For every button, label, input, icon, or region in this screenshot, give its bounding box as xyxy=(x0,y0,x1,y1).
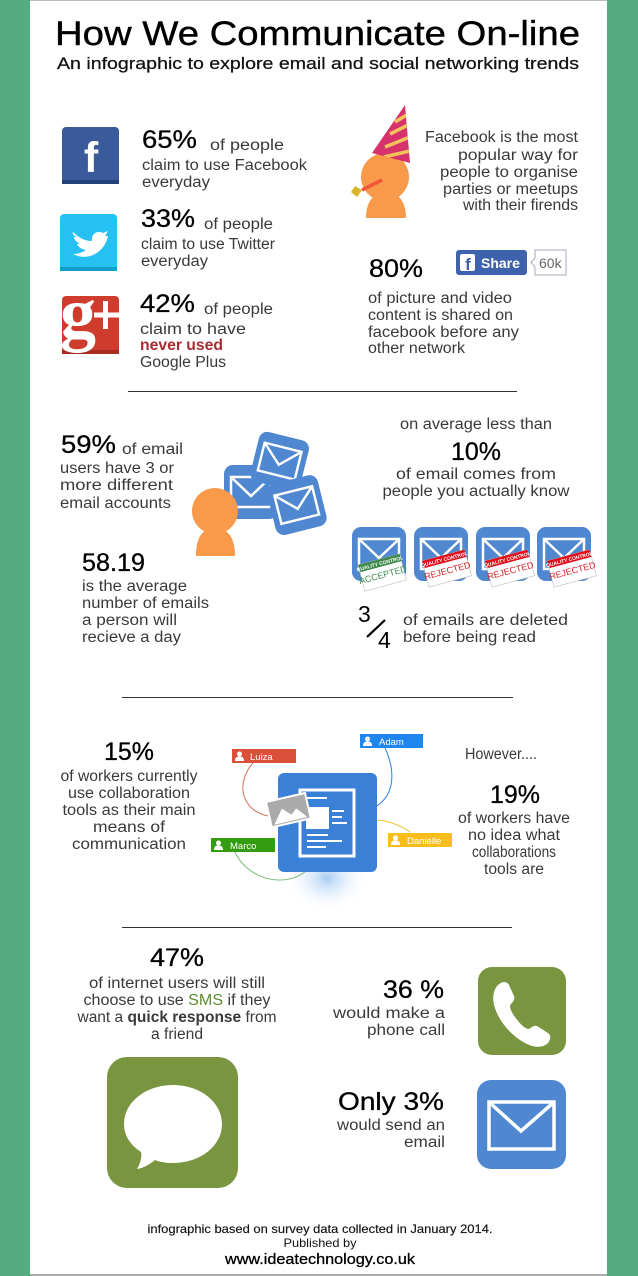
stat: 58.19: number of emails xyxy=(82,595,209,612)
stat: 58.19: recieve a day xyxy=(82,629,181,646)
stat: 59% email accounts: 59% xyxy=(61,431,116,459)
stat: twitter: everyday xyxy=(141,253,208,270)
stat: 58.19: 58.19 xyxy=(82,549,145,577)
stat: 80%: other network xyxy=(368,340,465,357)
stat: three quarters: 4 xyxy=(378,627,391,653)
stat: facebook: 65% xyxy=(142,126,197,154)
stat: 59% email accounts: more different xyxy=(60,477,174,494)
panel: social usage stats xyxy=(60,126,307,371)
label: Luiza: Luiza xyxy=(250,752,273,763)
stat: 47% SMS: choose to use SMS if they xyxy=(84,992,271,1009)
icon: facebook xyxy=(62,127,119,184)
icon: sms bubble xyxy=(107,1057,238,1188)
footer: www.ideatechnology.co.uk xyxy=(224,1251,416,1268)
stat: 19%: tools are xyxy=(484,861,544,878)
stat: facebook: everyday xyxy=(142,174,210,191)
stat: 10% xyxy=(382,416,570,500)
stat: 15%: use collaboration xyxy=(68,785,190,802)
stat: only 3%: email xyxy=(404,1134,445,1151)
stat: 10%: of email comes from xyxy=(396,466,556,483)
label: Adam xyxy=(360,734,423,748)
label: Danielle: Danielle xyxy=(407,836,441,847)
icon: facebook share button xyxy=(456,250,566,275)
icons: quality control envelopes xyxy=(352,527,599,592)
label: Marco: Marco xyxy=(230,841,256,852)
stat: 10%: on average less than xyxy=(400,416,552,433)
text: facebook parties: parties or meetups xyxy=(443,181,578,198)
icon: google plus xyxy=(62,296,119,354)
stat: only 3% xyxy=(336,1088,445,1151)
stat: 80%: of picture and video xyxy=(368,290,512,307)
stat: 47% SMS: of internet users will still xyxy=(89,975,265,992)
footer: Published by xyxy=(284,1236,356,1250)
footer: infographic based on survey data collected in January 2014. xyxy=(148,1222,493,1236)
stat: twitter xyxy=(141,205,275,270)
stat: google plus: never used xyxy=(140,337,223,354)
stat: 59% email accounts: of email xyxy=(122,441,183,458)
stat: three quarters: of emails are deleted xyxy=(403,612,568,629)
icon: facebook share button: Share xyxy=(481,255,520,271)
stat: 59% email accounts: users have 3 or xyxy=(60,460,174,477)
stat: 47% SMS: a friend xyxy=(151,1026,203,1043)
stat: 36% phone: 36 % xyxy=(383,976,444,1004)
stat: 15%: of workers currently xyxy=(60,768,198,785)
title: How We Communicate On-line xyxy=(55,15,580,53)
stat: 19%: However.... xyxy=(465,746,537,763)
stat: three quarters: 3 xyxy=(358,601,371,627)
icon: person with envelopes xyxy=(192,430,328,556)
text: facebook parties: popular way for xyxy=(458,147,578,164)
stat: google plus: 42% xyxy=(140,290,195,318)
stat: 36% phone: would make a xyxy=(332,1005,445,1022)
stat: 80% xyxy=(368,255,519,357)
stat: three quarters xyxy=(358,601,568,653)
stat: 19%: 19% xyxy=(490,781,540,809)
label: Danielle xyxy=(388,833,452,847)
stat: 80%: facebook before any xyxy=(368,324,519,341)
stat: facebook: claim to use Facebook xyxy=(142,157,307,174)
subtitle: An infographic to explore email and social networking trends xyxy=(57,54,579,73)
stat: 36% phone xyxy=(332,976,445,1039)
stat: google plus: claim to have xyxy=(140,321,246,338)
stat: 15%: tools as their main xyxy=(62,802,196,819)
stat: facebook xyxy=(142,126,307,191)
label: Marco xyxy=(211,838,275,852)
stat: 58.19: is the average xyxy=(82,578,187,595)
footer xyxy=(148,1222,493,1268)
stat: 19%: collaborations xyxy=(472,844,556,861)
text: facebook parties: Facebook is the most xyxy=(425,129,579,146)
stat: google plus: Google Plus xyxy=(140,354,226,371)
stat: 80%: content is shared on xyxy=(368,307,513,324)
stat: 47% SMS: want a quick response from xyxy=(77,1009,276,1026)
stat: 19% xyxy=(458,746,570,878)
text: facebook parties: with their firends xyxy=(462,197,578,214)
stat: 19%: no idea what xyxy=(468,827,561,844)
stat: 58.19: a person will xyxy=(82,612,177,629)
stat: 36% phone: phone call xyxy=(367,1022,445,1039)
icon: google plus: g xyxy=(60,273,96,353)
stat: 15%: 15% xyxy=(104,738,154,766)
stat: only 3%: would send an xyxy=(336,1117,445,1134)
label: Adam: Adam xyxy=(379,737,404,748)
stat: twitter: 33% xyxy=(141,205,195,233)
icon: facebook share button: 60k xyxy=(539,255,563,271)
icon: facebook share button: f xyxy=(465,255,471,274)
stat: 59% email accounts: email accounts xyxy=(60,495,171,512)
text: facebook parties xyxy=(425,129,579,214)
stat: twitter: claim to use Twitter xyxy=(141,236,275,253)
stat: google plus: of people xyxy=(204,301,273,318)
stat: 10%: people you actually know xyxy=(382,483,570,500)
stat: google plus xyxy=(140,290,273,371)
stat: only 3%: Only 3% xyxy=(338,1088,444,1116)
stat: 47% SMS: 47% xyxy=(150,944,204,972)
stat: 15%: communication xyxy=(72,836,186,853)
icons: quality control envelopes: QUALITY CONTROL xyxy=(356,555,404,573)
icons: quality control envelopes: ACCEPTED xyxy=(358,564,408,586)
icon: email xyxy=(477,1080,566,1169)
stat: twitter: of people xyxy=(204,216,273,233)
stat: 80%: 80% xyxy=(369,255,423,283)
stat: 15% xyxy=(60,738,198,853)
stat: 19%: of workers have xyxy=(458,810,570,827)
diagram: collaboration tool xyxy=(211,734,452,912)
stat: 15%: means of xyxy=(93,819,166,836)
text: facebook parties: people to organise xyxy=(440,164,578,181)
icon: facebook: f xyxy=(84,134,99,182)
icon: party person xyxy=(351,105,410,218)
label: Luiza xyxy=(232,749,296,763)
icon: twitter xyxy=(60,214,117,271)
stat: three quarters: before being read xyxy=(403,629,536,646)
stat: 10%: 10% xyxy=(451,438,501,466)
icon: phone xyxy=(478,967,566,1055)
stat: 58.19 xyxy=(82,549,209,646)
stat: 47% SMS xyxy=(77,944,276,1043)
stat: 59% email accounts xyxy=(60,431,183,512)
stat: facebook: of people xyxy=(210,137,284,154)
